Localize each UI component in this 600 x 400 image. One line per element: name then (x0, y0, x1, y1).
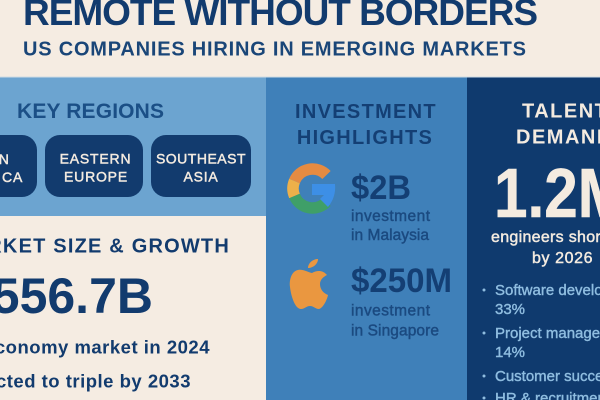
divider (0, 76, 600, 78)
chip: Southeast Asia: SOUTHEAST (156, 150, 246, 166)
stat: $250M in Singapore: $250M (351, 262, 452, 300)
chip: Eastern Europe (45, 135, 143, 197)
text: engineers shortage (491, 229, 600, 267)
chip: Latin America (0, 135, 37, 197)
stat: $250M in Singapore: investment (351, 302, 431, 320)
icon: Google G (293, 169, 335, 208)
stat: $250M in Singapore (351, 262, 452, 340)
heading: investment highlights (295, 101, 437, 149)
chip: Eastern Europe: EASTERN (60, 150, 131, 166)
list: roles: 33% (495, 301, 525, 318)
chip: Southeast Asia: ASIA (183, 168, 219, 184)
list: roles (482, 282, 600, 400)
heading: investment highlights: INVESTMENT (295, 101, 437, 123)
panel: talent demand (467, 77, 600, 400)
stat: $2B in Malaysia: $2B (351, 169, 411, 207)
text: engineers shortage: by 2026 (532, 250, 593, 267)
panel: investment highlights (266, 77, 467, 400)
stat: $2B in Malaysia: investment (351, 208, 431, 225)
chip: Eastern Europe: EUROPE (64, 168, 128, 184)
panel: key regions (0, 77, 266, 216)
icon: Apple (290, 259, 328, 309)
panel: market size and growth (0, 216, 266, 400)
panel: header (0, 0, 600, 77)
list: roles: 14% (495, 344, 525, 361)
stat: $2B in Malaysia: in Malaysia (351, 227, 429, 244)
heading: key regions: KEY REGIONS (17, 100, 164, 123)
chip: Southeast Asia (151, 135, 251, 197)
stat: $2B in Malaysia (351, 169, 431, 244)
stat: $250M in Singapore: in Singapore (351, 322, 439, 340)
heading: talent demand (516, 100, 600, 148)
subtitle: US COMPANIES HIRING IN EMERGING MARKETS (23, 38, 526, 60)
heading: investment highlights: HIGHLIGHTS (297, 127, 433, 149)
